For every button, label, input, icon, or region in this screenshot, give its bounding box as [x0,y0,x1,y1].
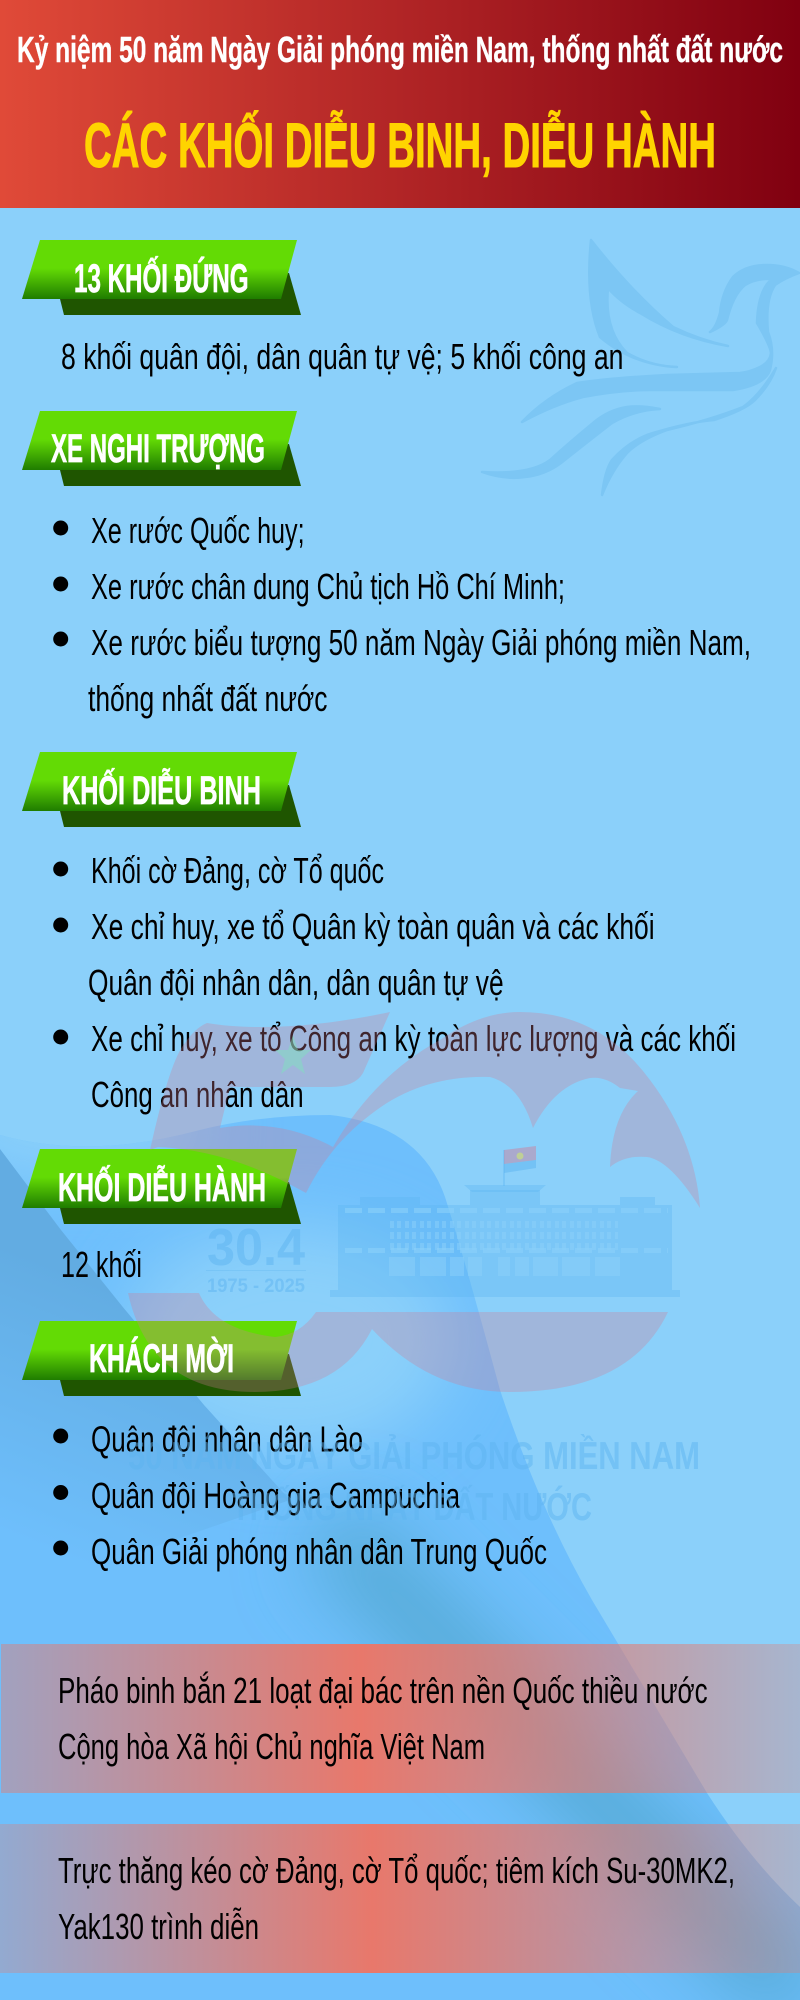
bullet list: Xe rước Quốc huy; [91,510,305,551]
ribbon [22,752,301,827]
section: khách mời [22,1321,547,1572]
callout: helicopters and jets: Yak130 trình diễn [58,1906,259,1947]
bullet list [53,510,751,719]
ribbon heading: 13 khối đứng: 13 KHỐI ĐỨNG [74,255,248,301]
bullet list: Xe rước chân dung Chủ tịch Hồ Chí Minh; [91,566,565,607]
section: khối diễu binh [22,752,736,1115]
bullet list: thống nhất đất nước [88,678,328,719]
ribbon [22,1321,301,1396]
ribbon heading: khối diễu hành: KHỐI DIỄU HÀNH [58,1164,266,1210]
header banner [0,0,800,208]
logo numeral 50 and dove [128,1012,700,1392]
logo caption: THỐNG NHẤT ĐẤT NƯỚC [232,1484,592,1529]
bullet list: Quân đội nhân dân Lào [91,1418,363,1460]
ribbon [22,240,301,315]
section: khối diễu hành [22,1149,301,1285]
ribbon [22,411,301,486]
palace silhouette [330,1150,680,1297]
ribbon [22,1149,301,1224]
ribbon heading: khách mời: KHÁCH MỜI [89,1335,234,1381]
ribbon heading: xe nghi trượng: XE NGHI TRƯỢNG [51,427,265,471]
ribbon heading: khối diễu binh: KHỐI DIỄU BINH [62,767,261,813]
palace flag [504,1146,536,1173]
bullet list: Quân Giải phóng nhân dân Trung Quốc [91,1531,547,1572]
background dove emblem [482,240,799,495]
bullet list [53,1418,547,1572]
date: 30.4 [207,1219,305,1277]
page background [0,1115,800,2000]
star [275,1035,311,1074]
bullet list: Quân đội nhân dân, dân quân tự vệ [88,962,504,1003]
date: 1975 - 2025 [207,1276,305,1297]
bullet list [53,850,736,1115]
callout: artillery salute [1,1644,800,1793]
bullet list: Khối cờ Đảng, cờ Tổ quốc [91,850,384,891]
bullet list: Công an nhân dân [91,1074,304,1115]
callout: helicopters and jets [0,1824,800,1973]
logo caption [128,1434,700,1529]
section: 13 khối đứng [22,240,624,377]
section: xe nghi trượng [22,411,751,719]
50th anniversary logo watermark [128,1012,700,1529]
bullet list: Quân đội Hoàng gia Campuchia [91,1475,460,1516]
text: 12 khối [61,1244,142,1285]
callout: artillery salute: Cộng hòa Xã hội Chủ nghĩa Việt Nam [58,1726,485,1767]
